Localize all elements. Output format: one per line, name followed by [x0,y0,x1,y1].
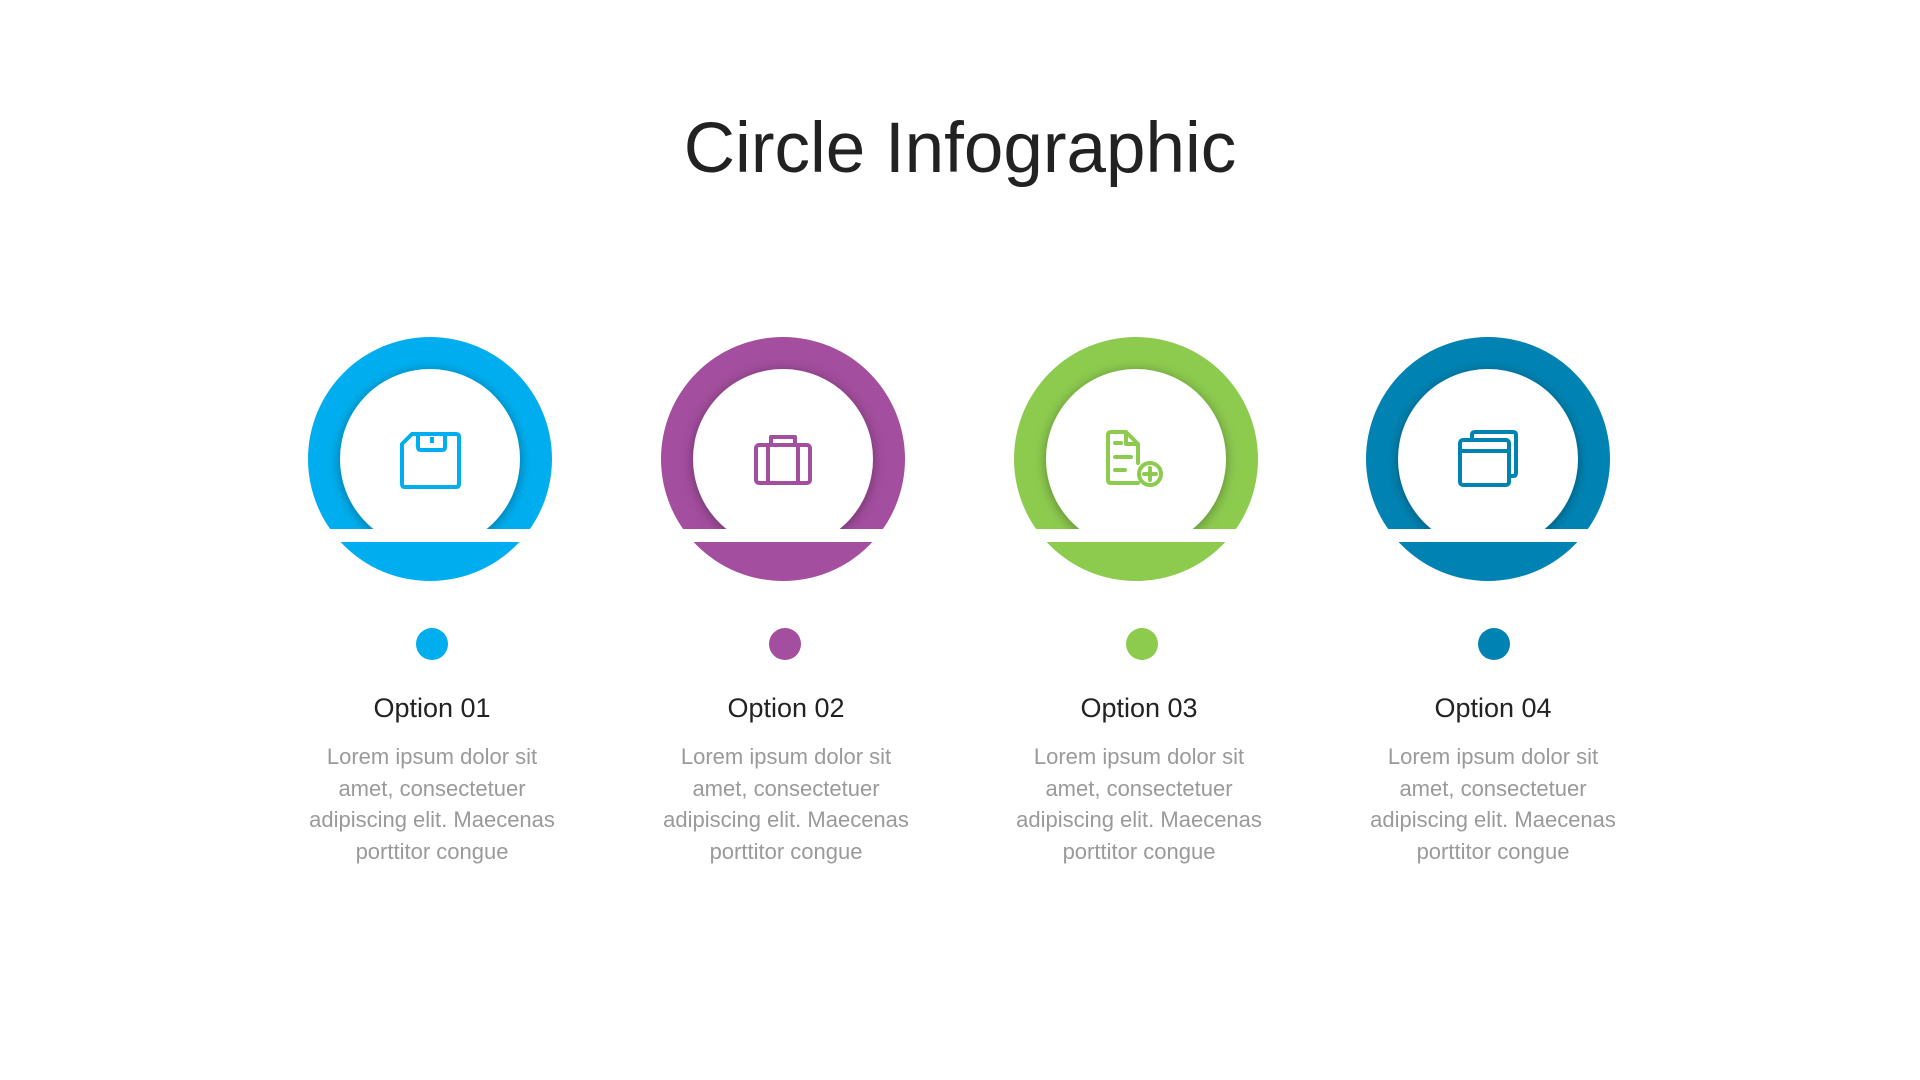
circle 1 [300,337,560,581]
dot 4 [1478,628,1510,660]
circle 3 [1006,337,1266,581]
option 3 text: Lorem ipsum dolor sit amet, consectetuer adipiscing elit. Maecenas porttitor congue [1016,744,1262,864]
circle 2 [653,337,913,581]
dot 3 [1126,628,1158,660]
icon: floppy disk [402,434,459,487]
icon: briefcase [756,437,810,483]
option 2 label: Option 02 [727,693,845,723]
dot 2 [769,628,801,660]
option 1 text: Lorem ipsum dolor sit amet, consectetuer adipiscing elit. Maecenas porttitor congue [309,744,555,864]
option 3 label: Option 03 [1080,693,1198,723]
option 4 label: Option 04 [1434,693,1552,723]
dot 1 [416,628,448,660]
icon: windows [1460,432,1516,485]
title: Circle Infographic [684,109,1236,188]
option 2 text: Lorem ipsum dolor sit amet, consectetuer adipiscing elit. Maecenas porttitor congue [663,744,909,864]
option 4 text: Lorem ipsum dolor sit amet, consectetuer adipiscing elit. Maecenas porttitor congue [1370,744,1616,864]
icon: document add [1108,432,1161,485]
option 1 label: Option 01 [373,693,491,723]
circle 4 [1358,337,1618,581]
